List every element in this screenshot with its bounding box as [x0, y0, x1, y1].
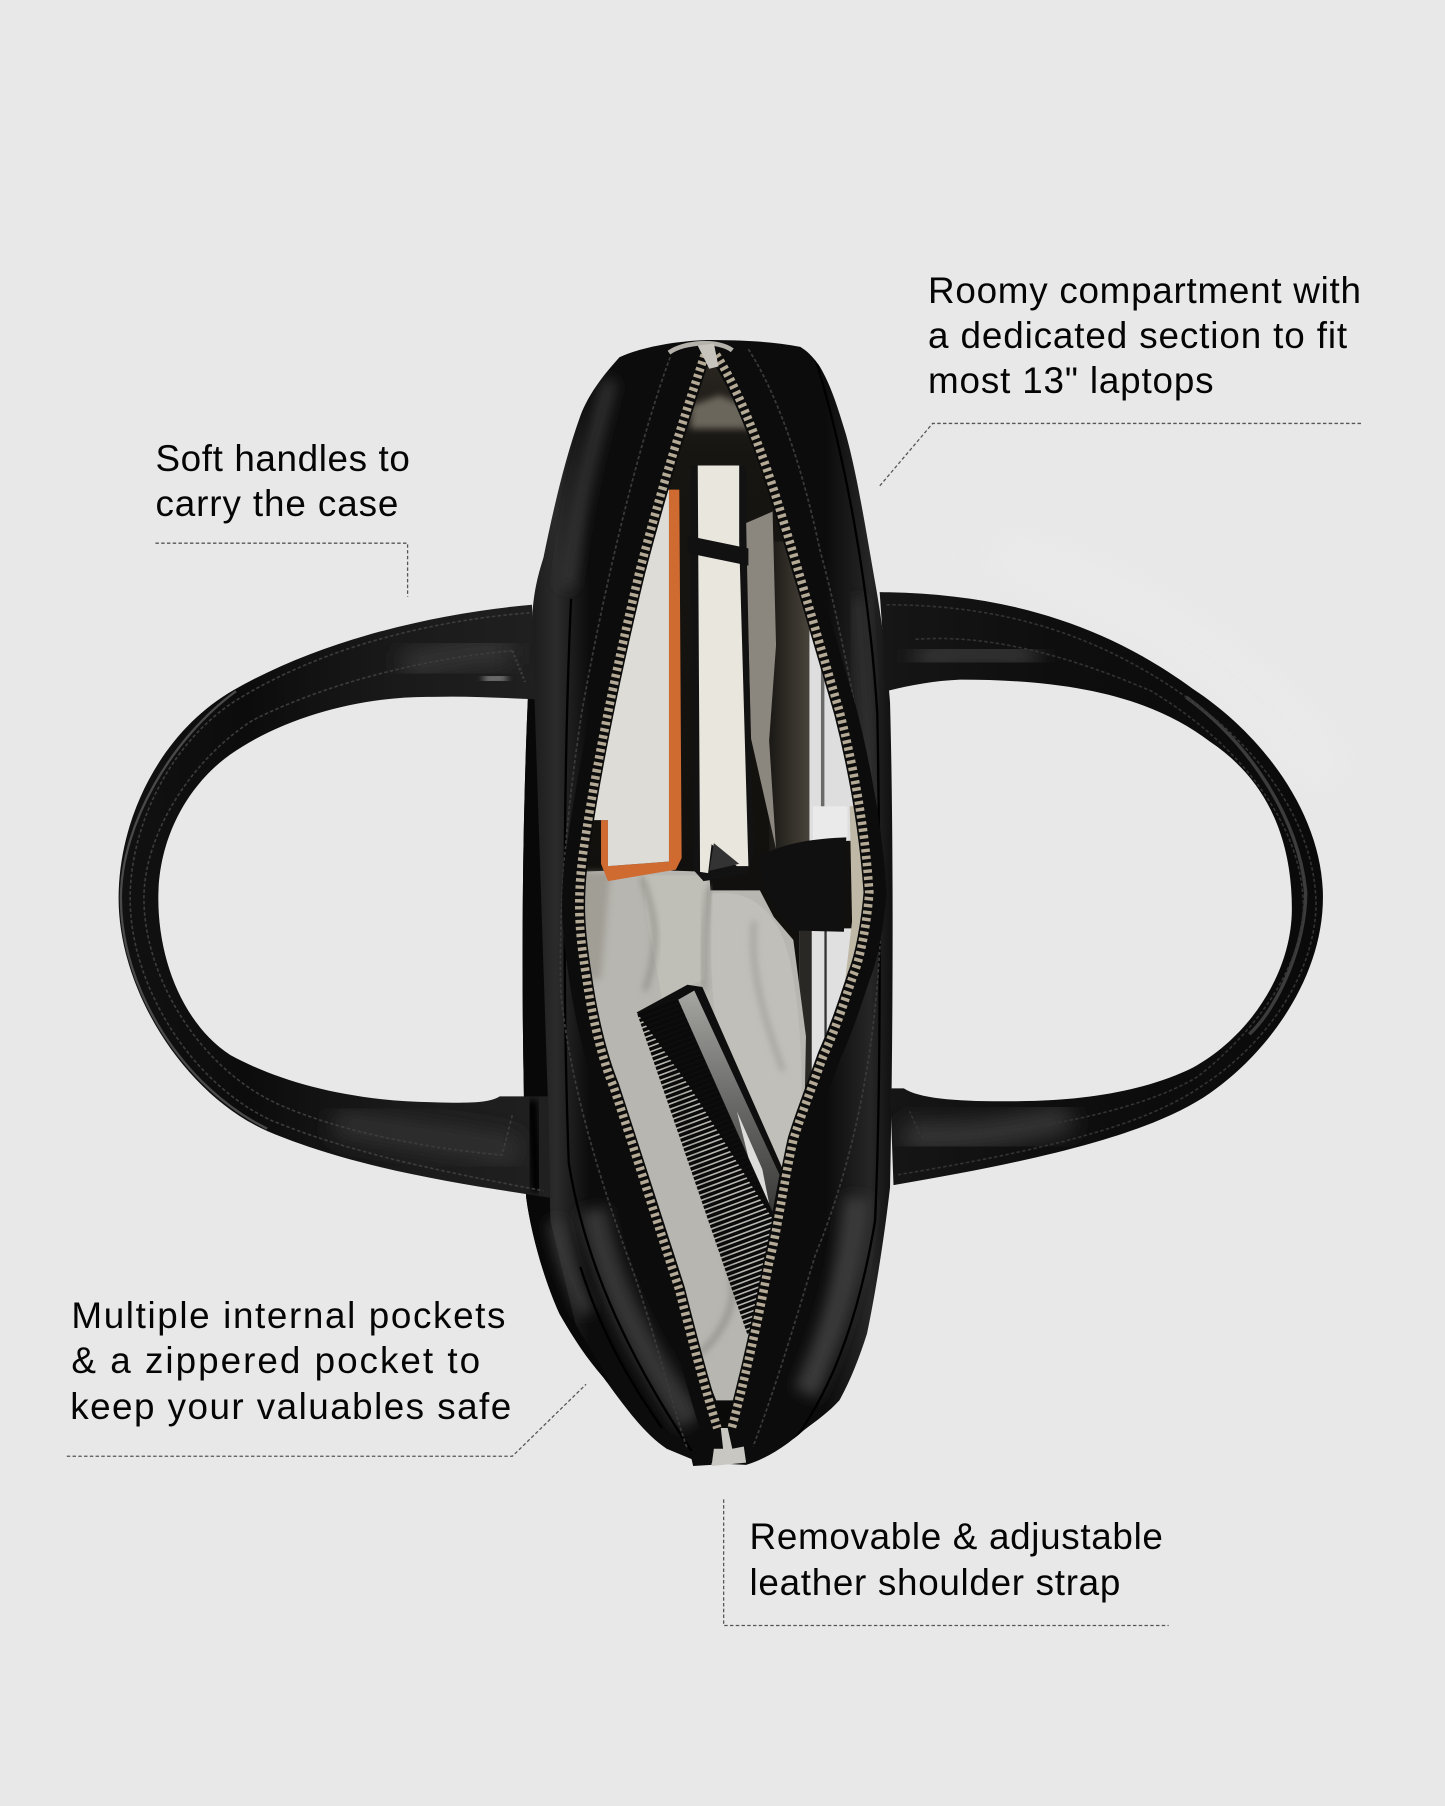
beige lining edge — [845, 806, 864, 980]
leader line — [724, 1499, 1169, 1626]
black leather loop — [770, 837, 846, 932]
callout text: & a zippered pocket to — [71, 1340, 480, 1381]
grey fabric pocket — [746, 512, 776, 849]
right handle — [880, 592, 1323, 1185]
bag photo illustration — [119, 340, 1323, 1466]
callout text: carry the case — [155, 483, 398, 524]
callout text — [928, 270, 1361, 401]
sweater — [570, 870, 806, 1400]
elastic band — [698, 538, 748, 566]
callout text: Soft handles to — [155, 438, 410, 479]
leader line — [67, 1384, 586, 1456]
callout text: Removable & adjustable — [750, 1516, 1163, 1557]
callout text — [750, 1516, 1163, 1603]
callout: soft handles — [155, 438, 410, 597]
left zipper — [574, 355, 717, 1428]
leather stitching — [560, 349, 881, 1449]
callout text: Multiple internal pockets — [71, 1295, 505, 1336]
infographic: bag with feature callouts — [66, 276, 1361, 1626]
dark lining — [669, 366, 852, 928]
left handle — [119, 605, 550, 1198]
callout: roomy compartment — [879, 270, 1361, 487]
callout text — [155, 438, 410, 524]
orange-edged book — [594, 490, 682, 882]
right zipper — [716, 355, 875, 1430]
callout text — [70, 1295, 511, 1427]
callout text: Roomy compartment with — [928, 270, 1361, 311]
laptop — [809, 622, 855, 841]
soft light on backdrop — [990, 553, 1336, 783]
top fabric lining — [691, 395, 760, 429]
comb — [637, 979, 785, 1324]
open compartment interior — [585, 366, 864, 1400]
callout text: leather shoulder strap — [750, 1562, 1120, 1603]
brown lining panel — [769, 541, 811, 852]
top zipper pull — [669, 343, 732, 369]
leader line — [155, 543, 408, 597]
white notebook — [694, 466, 752, 882]
bottom zipper pull — [690, 1428, 746, 1466]
callout text: most 13" laptops — [928, 360, 1214, 401]
bag body — [518, 340, 893, 1465]
leader line — [879, 423, 1361, 487]
lower laptop edge — [799, 928, 852, 1088]
callout: shoulder strap — [724, 1499, 1169, 1626]
callout: internal pockets — [67, 1295, 586, 1456]
callout text: a dedicated section to fit — [928, 315, 1347, 356]
callout text: keep your valuables safe — [70, 1386, 511, 1427]
